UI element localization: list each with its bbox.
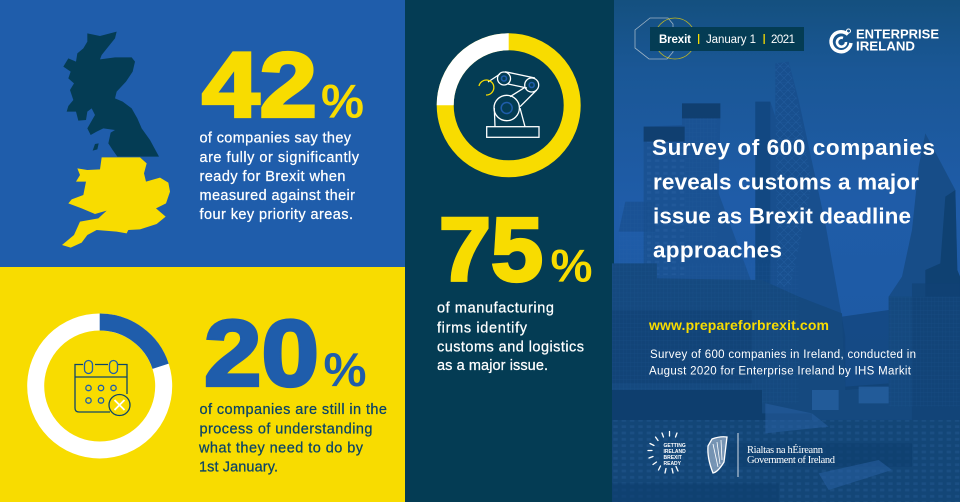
panel: 42% UK readiness — [0, 0, 405, 267]
text: 42% description: are fully or significantly — [200, 150, 360, 166]
percent sign: 20%: % — [324, 343, 366, 396]
text: 20% description: what they need to do by — [198, 440, 364, 456]
headline: Survey of 600 companies — [652, 135, 935, 160]
logo: Enterprise Ireland — [831, 26, 939, 54]
date badge: Brexit — [659, 34, 691, 46]
date badge — [635, 18, 804, 59]
icon: UK map — [62, 32, 170, 248]
photo: city skyline — [612, 62, 960, 502]
text: 75% description: firms identify — [437, 320, 528, 336]
big number: 42: 42 — [202, 34, 317, 136]
text: survey source — [649, 349, 916, 377]
panel: headline and sources — [612, 0, 960, 502]
text: 20% description: process of understanding — [200, 421, 372, 437]
headline: issue as Brexit deadline — [653, 203, 911, 228]
text: survey source: August 2020 for Enterprise Ireland by IHS Markit — [649, 365, 912, 377]
website link: www.prepareforbrexit.com — [648, 317, 829, 333]
percent sign: 42%: % — [321, 74, 364, 128]
text: 42% description: ready for Brexit when — [200, 169, 346, 185]
logo: Enterprise Ireland: ENTERPRISE — [856, 26, 939, 42]
chart: donut 20% — [36, 322, 164, 450]
logo text: Government of Ireland — [747, 444, 836, 466]
text: 75% description: as a major issue. — [437, 358, 548, 374]
headline — [652, 135, 935, 263]
text: 20% description — [198, 402, 387, 476]
panel: 75% manufacturing — [405, 0, 614, 502]
text: 42% description: measured against their — [200, 188, 355, 204]
panel: 20% understanding — [0, 267, 405, 502]
text: 75% description: of manufacturing — [437, 301, 554, 317]
logo: Getting Ireland Brexit Ready: READY — [664, 461, 682, 467]
logo text: Government of Ireland: Government of Ireland — [747, 455, 836, 466]
logo: harp — [708, 437, 727, 473]
text: 42% description: four key priority areas. — [200, 207, 353, 223]
logo text: Government of Ireland: Rialtas na hÉireann — [747, 444, 824, 456]
logo: Getting Ireland Brexit Ready: IRELAND — [664, 449, 686, 455]
text: 75% description — [437, 301, 584, 374]
logo: Enterprise Ireland: IRELAND — [856, 38, 915, 54]
headline: reveals customs a major — [653, 169, 919, 194]
percent sign: 75%: % — [550, 240, 592, 292]
chart: donut 75% — [445, 42, 572, 169]
logo: Getting Ireland Brexit Ready: GETTING — [664, 443, 686, 449]
big number: 75: 75 — [439, 200, 543, 300]
date badge: January 1 — [706, 34, 756, 46]
headline: approaches — [653, 238, 782, 263]
date badge: 2021 — [771, 34, 795, 46]
text: 20% description: of companies are still in the — [200, 402, 387, 418]
text: 75% description: customs and logistics — [437, 340, 584, 356]
icon: robot arm — [479, 72, 539, 137]
big number: 20: 20 — [204, 300, 319, 406]
text: 42% description: of companies say they — [200, 130, 352, 146]
logo: Getting Ireland Brexit Ready: BREXIT — [664, 455, 682, 461]
divider — [738, 433, 739, 477]
logo: Getting Ireland Brexit Ready — [648, 432, 686, 473]
icon: calendar with cross — [75, 360, 130, 416]
text: 42% description — [200, 130, 360, 223]
text: survey source: Survey of 600 companies in Ireland, conducted in — [650, 349, 916, 361]
text: 20% description: 1st January. — [199, 460, 278, 476]
